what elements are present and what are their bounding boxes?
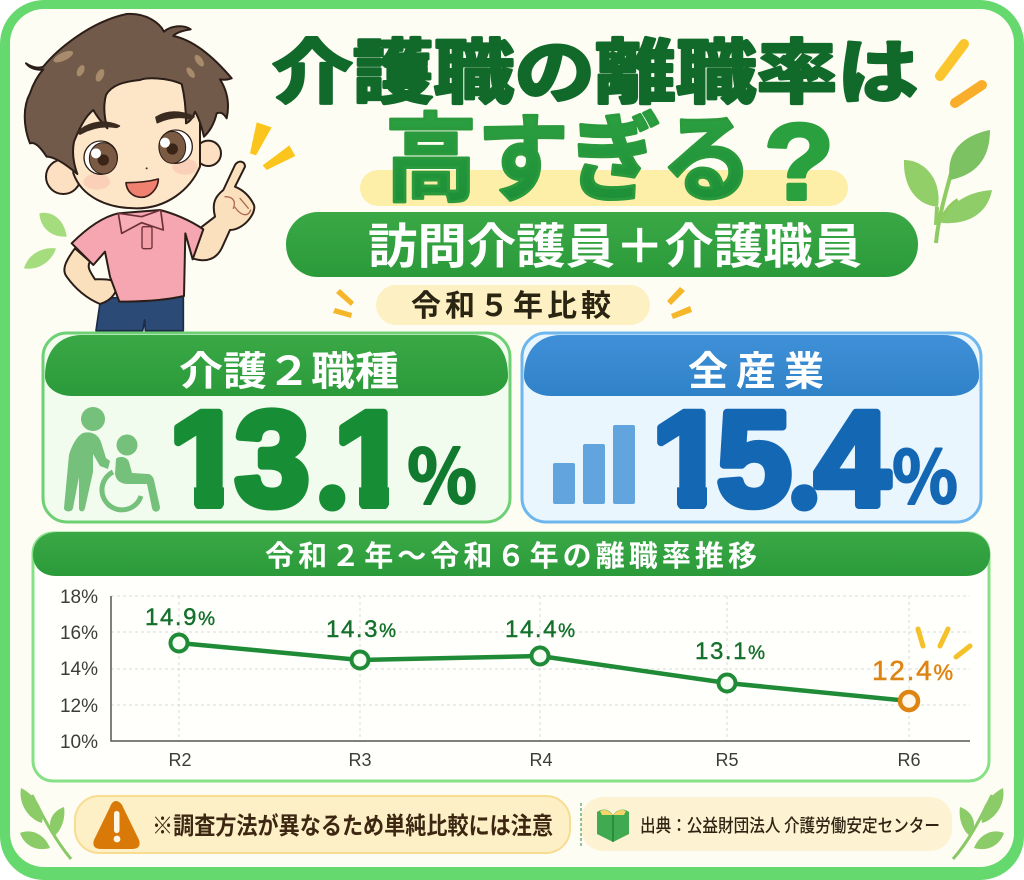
- panel: care two occupations: [43, 333, 510, 535]
- caution text: ※調査方法が異なるため単純比較には注意: [152, 806, 553, 841]
- panel header: care two occupations: [45, 335, 508, 396]
- y axis labels: 16%: [60, 623, 98, 644]
- panel: all industries: [522, 333, 981, 535]
- character face: [72, 77, 200, 208]
- stat value: 15.4: 1: [652, 385, 727, 534]
- icon: warning triangle: [93, 801, 140, 849]
- chart heading: 令和２年～令和６年の離職率推移: [265, 533, 757, 575]
- title question mark: ?: [764, 101, 834, 222]
- x axis labels: R3: [348, 750, 372, 770]
- y axis labels: 14%: [60, 659, 98, 680]
- x axis labels: R6: [897, 750, 921, 770]
- stat value: 13.1: [174, 407, 389, 512]
- data points: [170, 634, 736, 692]
- year badge text: 令和５年比較: [411, 281, 611, 325]
- illustration: pointing character: [24, 14, 295, 331]
- x axis labels: R2: [168, 750, 192, 770]
- y axis labels: 12%: [60, 696, 98, 717]
- chart axes: [111, 596, 970, 741]
- y axis labels: 10%: [60, 732, 98, 753]
- chart gridlines: [111, 596, 970, 741]
- stat value: 15.4: 5: [717, 385, 792, 534]
- callout: survey caution: [75, 796, 570, 853]
- character hair: [25, 14, 232, 174]
- y axis labels: [60, 587, 98, 753]
- x axis labels: [168, 750, 921, 770]
- year badge: [376, 281, 650, 325]
- data labels: 14.4%: [505, 616, 575, 643]
- stat value: 13.1: 1: [169, 385, 244, 534]
- title line 2: 高すぎる: [385, 82, 753, 221]
- panel heading: all industries: 全産業: [688, 339, 824, 397]
- character left arm: [64, 248, 117, 304]
- highlighted data label R6: 12.4%: [872, 655, 953, 686]
- stat value: 13.1: 3: [235, 385, 310, 534]
- x axis labels: R5: [715, 750, 739, 770]
- data labels: 13.1%: [695, 638, 765, 665]
- icon: open book: [597, 810, 629, 842]
- stat value: 15.4: [657, 408, 893, 512]
- title highlight bar: [360, 170, 848, 206]
- stat value: 13.1: .: [316, 390, 348, 535]
- character right arm and hand: [193, 162, 254, 260]
- stat value: 13.1: 1: [334, 385, 409, 534]
- subtitle text: 訪問介護員＋介護職員: [368, 207, 862, 277]
- source text: 出典：公益財団法人 介護労働安定センター: [640, 812, 940, 838]
- trend line: [179, 643, 909, 701]
- stat value: 15.4: .: [788, 390, 820, 535]
- callout: data source: [581, 797, 952, 851]
- character polo shirt: [72, 210, 203, 302]
- icon: bar chart: [553, 425, 635, 504]
- character mouth: [126, 179, 158, 197]
- data labels: 14.3%: [326, 616, 396, 643]
- icon: caregiver with wheelchair: [64, 407, 160, 512]
- orange sparks: [940, 44, 982, 103]
- panel header: all industries: [524, 335, 979, 396]
- x axis labels: R4: [529, 750, 553, 770]
- y axis labels: 18%: [60, 587, 98, 608]
- character eyebrows: [77, 122, 119, 134]
- character leaves: [24, 213, 67, 269]
- character eyes: [84, 141, 117, 174]
- character trousers: [96, 295, 183, 331]
- data labels: 14.9%: [145, 604, 215, 631]
- highlighted data point R6: [900, 692, 918, 710]
- character ears: [46, 159, 81, 194]
- data labels: [145, 604, 765, 665]
- yellow pointing sparks: [250, 122, 295, 170]
- panel: turnover trend chart: [33, 532, 990, 781]
- stat value: 15.4: 4: [815, 385, 890, 534]
- sprig bottom right: [953, 788, 1004, 859]
- subtitle pill: [286, 207, 918, 277]
- title line 1: 介護職の離職率は: [272, 17, 918, 118]
- highlight sparks: [918, 629, 970, 657]
- stat unit: %: [407, 418, 477, 525]
- sprig bottom left: [20, 788, 71, 859]
- panel heading: care two occupations: 介護２職種: [179, 339, 399, 397]
- chart header: [33, 532, 990, 576]
- stat unit: %: [892, 419, 958, 524]
- plant sprig top right: [904, 130, 992, 243]
- year badge sparks: [333, 287, 692, 319]
